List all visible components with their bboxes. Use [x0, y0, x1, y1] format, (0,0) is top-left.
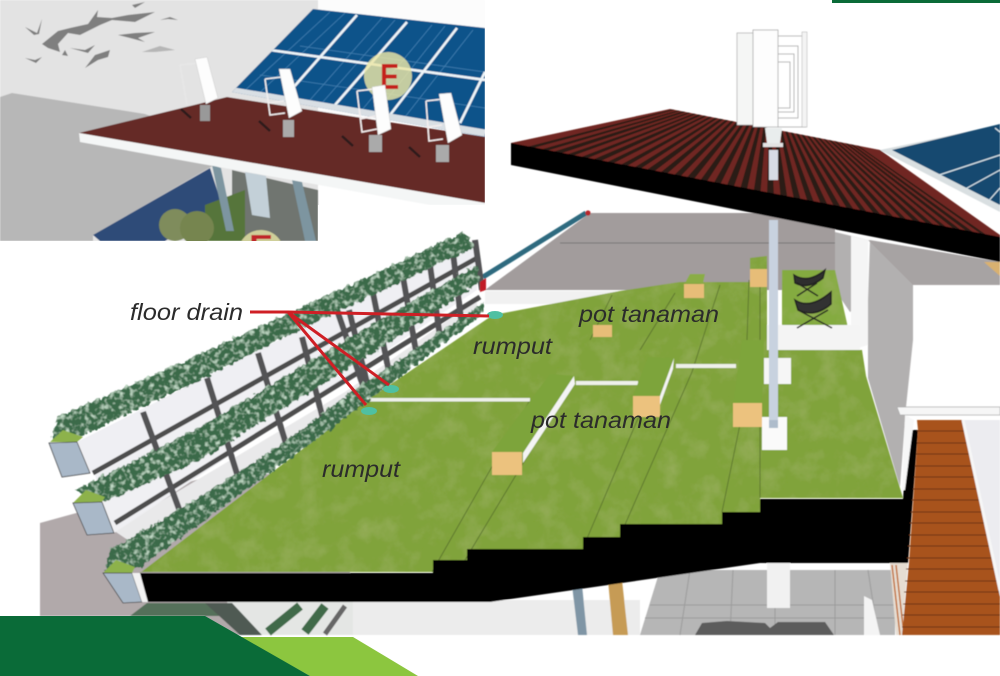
lower planters below slab	[130, 602, 353, 635]
steel vent pole	[769, 220, 778, 428]
brown roof slab	[79, 97, 485, 203]
marker E lower: E	[249, 227, 273, 268]
tile floor	[640, 570, 895, 635]
marker E upper: E	[380, 56, 399, 97]
blue pool area	[93, 168, 222, 241]
grass terrace	[140, 256, 903, 573]
foliage: middle hedge	[75, 265, 480, 502]
lower background wall	[40, 470, 350, 635]
blue coping along parapet	[483, 213, 586, 277]
bottom light green band	[240, 637, 418, 676]
side gray wall	[835, 232, 1000, 487]
vent pipe on roof	[763, 128, 783, 180]
stair side rails	[890, 563, 908, 635]
shrubs	[159, 209, 191, 241]
small pot upper middle	[684, 274, 705, 298]
large wind turbine	[737, 30, 807, 127]
grey rooftop behind	[485, 213, 835, 290]
steel post	[572, 585, 587, 635]
planter end 2	[73, 490, 114, 535]
wooden staircase	[902, 420, 1000, 635]
top planter white body	[77, 240, 477, 473]
black slab front	[140, 430, 918, 602]
chairs	[794, 270, 832, 328]
middle small pots white	[764, 358, 791, 384]
dark rails	[93, 258, 480, 523]
wooden post	[608, 580, 628, 635]
inset photo: solar roof with wind turbines	[0, 0, 485, 241]
red parapet fittings	[480, 278, 486, 292]
wind turbine 1	[180, 57, 218, 121]
sofa	[695, 621, 834, 635]
solar panels	[232, 8, 485, 138]
terrace with chairs	[782, 270, 848, 328]
wind turbine 4	[409, 93, 462, 162]
dark posts	[143, 240, 482, 517]
roof black fascia	[511, 143, 1000, 262]
foliage: top hedge	[52, 232, 475, 440]
shingled upper roof	[511, 108, 1000, 238]
floor drain markers	[361, 311, 503, 415]
planter box 1	[492, 374, 575, 475]
small pot upper right	[750, 269, 767, 287]
solar panel corner	[880, 124, 1000, 212]
slab joints on grass	[248, 280, 760, 572]
drain pipe planks	[370, 364, 736, 402]
marker E upper	[364, 52, 412, 100]
flock of birds	[25, 2, 178, 68]
white tower piece	[851, 236, 868, 350]
stair handrail	[897, 407, 1000, 415]
building under the roof	[232, 170, 318, 241]
foliage: lower hedge	[105, 303, 483, 570]
white low wall	[864, 596, 880, 635]
wall white corner	[902, 415, 914, 490]
ground plane	[0, 92, 212, 241]
wind turbine 3	[342, 85, 391, 152]
marker E lower	[241, 229, 281, 241]
planter end 1	[49, 430, 90, 477]
label: rumput lower: rumput	[322, 456, 402, 482]
planter end 3	[103, 560, 148, 603]
back white strip	[485, 291, 690, 304]
white eave	[79, 133, 485, 205]
lower floor backdrop	[340, 600, 640, 635]
inset backdrop	[0, 0, 318, 241]
label: pot tanaman lower: pot tanaman	[530, 407, 671, 433]
label: rumput upper: rumput	[473, 333, 554, 359]
top right green bar	[832, 0, 1000, 3]
planter box 3	[733, 340, 764, 427]
white column under slab	[767, 562, 790, 608]
white area behind panels	[318, 0, 485, 120]
wind turbine 2	[259, 69, 302, 137]
label: pot tanaman upper: pot tanaman	[578, 301, 719, 327]
floor drain leader lines	[250, 312, 489, 405]
bottom dark green band	[0, 616, 310, 676]
planter box 2	[633, 357, 674, 417]
third planter white body	[113, 300, 477, 555]
label: floor drain: floor drain	[130, 299, 243, 325]
second planter white body	[95, 258, 477, 533]
small pot upper left	[593, 325, 612, 337]
white curb behind upper grass	[767, 325, 860, 350]
